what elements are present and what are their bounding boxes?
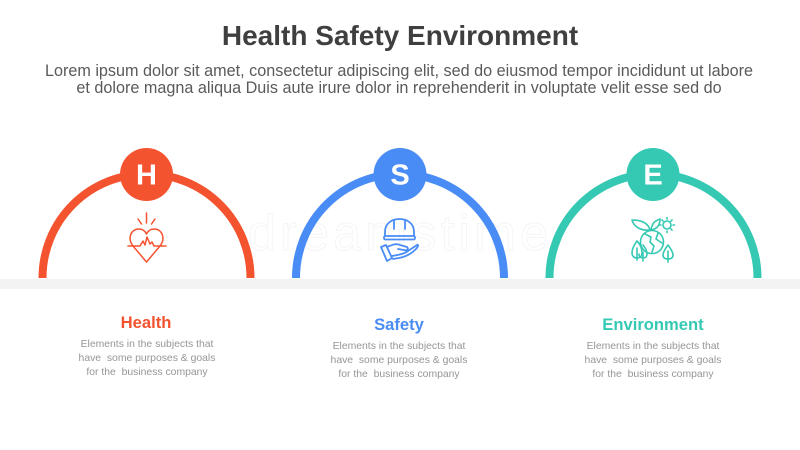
- icon: helmet and hand: [381, 219, 418, 261]
- intro text: [45, 62, 753, 97]
- environment arc: [550, 148, 758, 278]
- baseline band: [0, 279, 800, 289]
- environment arc: E: [643, 160, 663, 192]
- intro text: Lorem ipsum dolor sit amet, consectetur adipiscing elit, sed do eiusmod tempor incididunt ut labore: [45, 62, 753, 80]
- environment text: have some purposes & goals: [585, 355, 721, 366]
- environment text: Elements in the subjects that: [587, 341, 719, 352]
- safety text: [331, 341, 468, 380]
- health arc: H: [136, 160, 157, 192]
- safety text: for the business company: [338, 369, 460, 380]
- safety arc: [296, 148, 504, 278]
- environment text: for the business company: [592, 369, 714, 380]
- watermark: dreamstime: [248, 205, 548, 261]
- environment text: [585, 341, 722, 380]
- health text: for the business company: [86, 367, 208, 378]
- intro text: et dolore magna aliqua Duis aute irure dolor in reprehenderit in voluptate velit esse sed do: [76, 79, 722, 97]
- safety text: have some purposes & goals: [331, 355, 467, 366]
- health text: have some purposes & goals: [79, 353, 215, 364]
- title: Health Safety Environment: [222, 20, 578, 51]
- environment heading: Environment: [602, 315, 704, 334]
- health arc: [42, 148, 250, 278]
- health heading: Health: [121, 313, 171, 332]
- safety arc: S: [390, 160, 410, 192]
- health text: Elements in the subjects that: [81, 339, 213, 350]
- icon: globe, leaves and sun: [632, 218, 674, 262]
- safety heading: Safety: [374, 315, 424, 334]
- icon: heart: [128, 213, 166, 262]
- safety text: Elements in the subjects that: [333, 341, 465, 352]
- health text: [79, 339, 216, 378]
